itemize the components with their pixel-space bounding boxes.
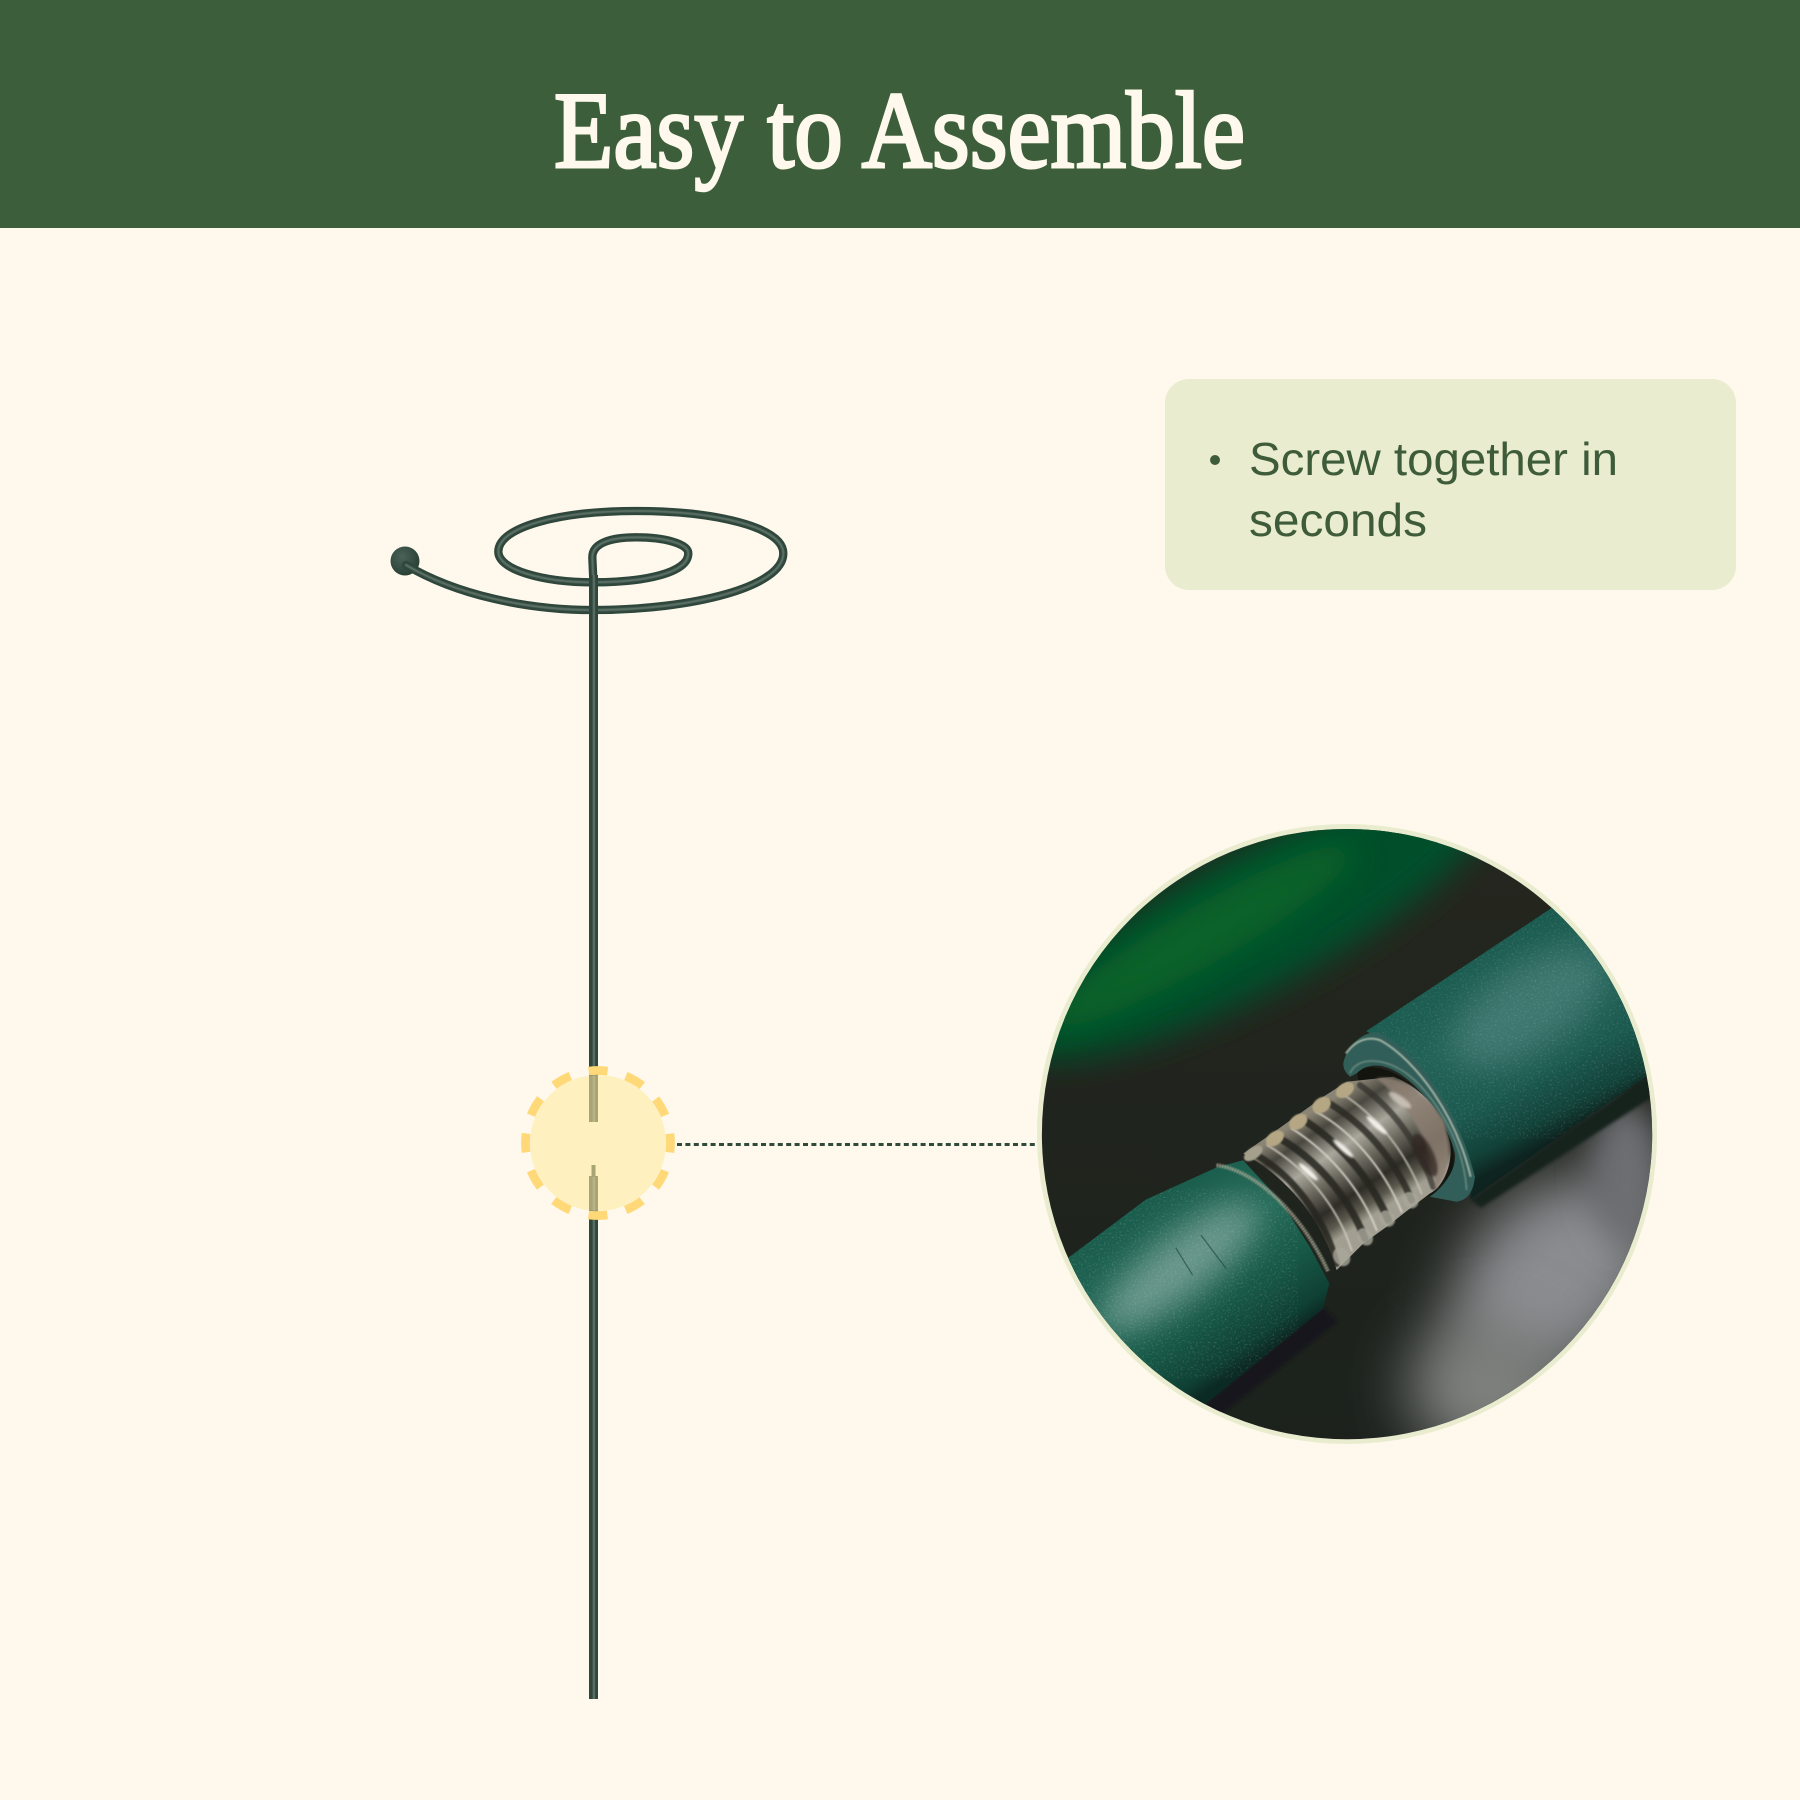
photo background [1042,829,1652,1440]
header banner [0,0,1800,228]
callout text: Screw together in [1249,433,1618,485]
callout text: seconds [1249,494,1427,546]
highlight circle over joint [526,1070,670,1216]
lower stake section [593,1165,595,1699]
thread highlights [1297,1114,1388,1182]
screw end [1377,1078,1449,1190]
dark gap inside tube end [1357,1067,1454,1197]
tube end rim [1343,1032,1475,1202]
lower tube [1068,1160,1330,1404]
upper stake section [593,575,595,1122]
spiral ring [406,511,783,610]
threaded screw [1241,1077,1451,1270]
lower tube end edge [1217,1165,1328,1272]
bullet [1210,455,1220,465]
upper tube [1366,908,1650,1209]
lower tube shadow [1201,1307,1338,1420]
thread crests [1241,1079,1357,1164]
title: Easy to Assemble [554,70,1245,191]
panel: feature callout [1165,379,1736,590]
close-up photo of threaded joint [1037,824,1657,1444]
dotted connector line [677,1143,1042,1146]
plant support stake with spiral top [390,511,783,1699]
spiral end ball [390,546,420,576]
